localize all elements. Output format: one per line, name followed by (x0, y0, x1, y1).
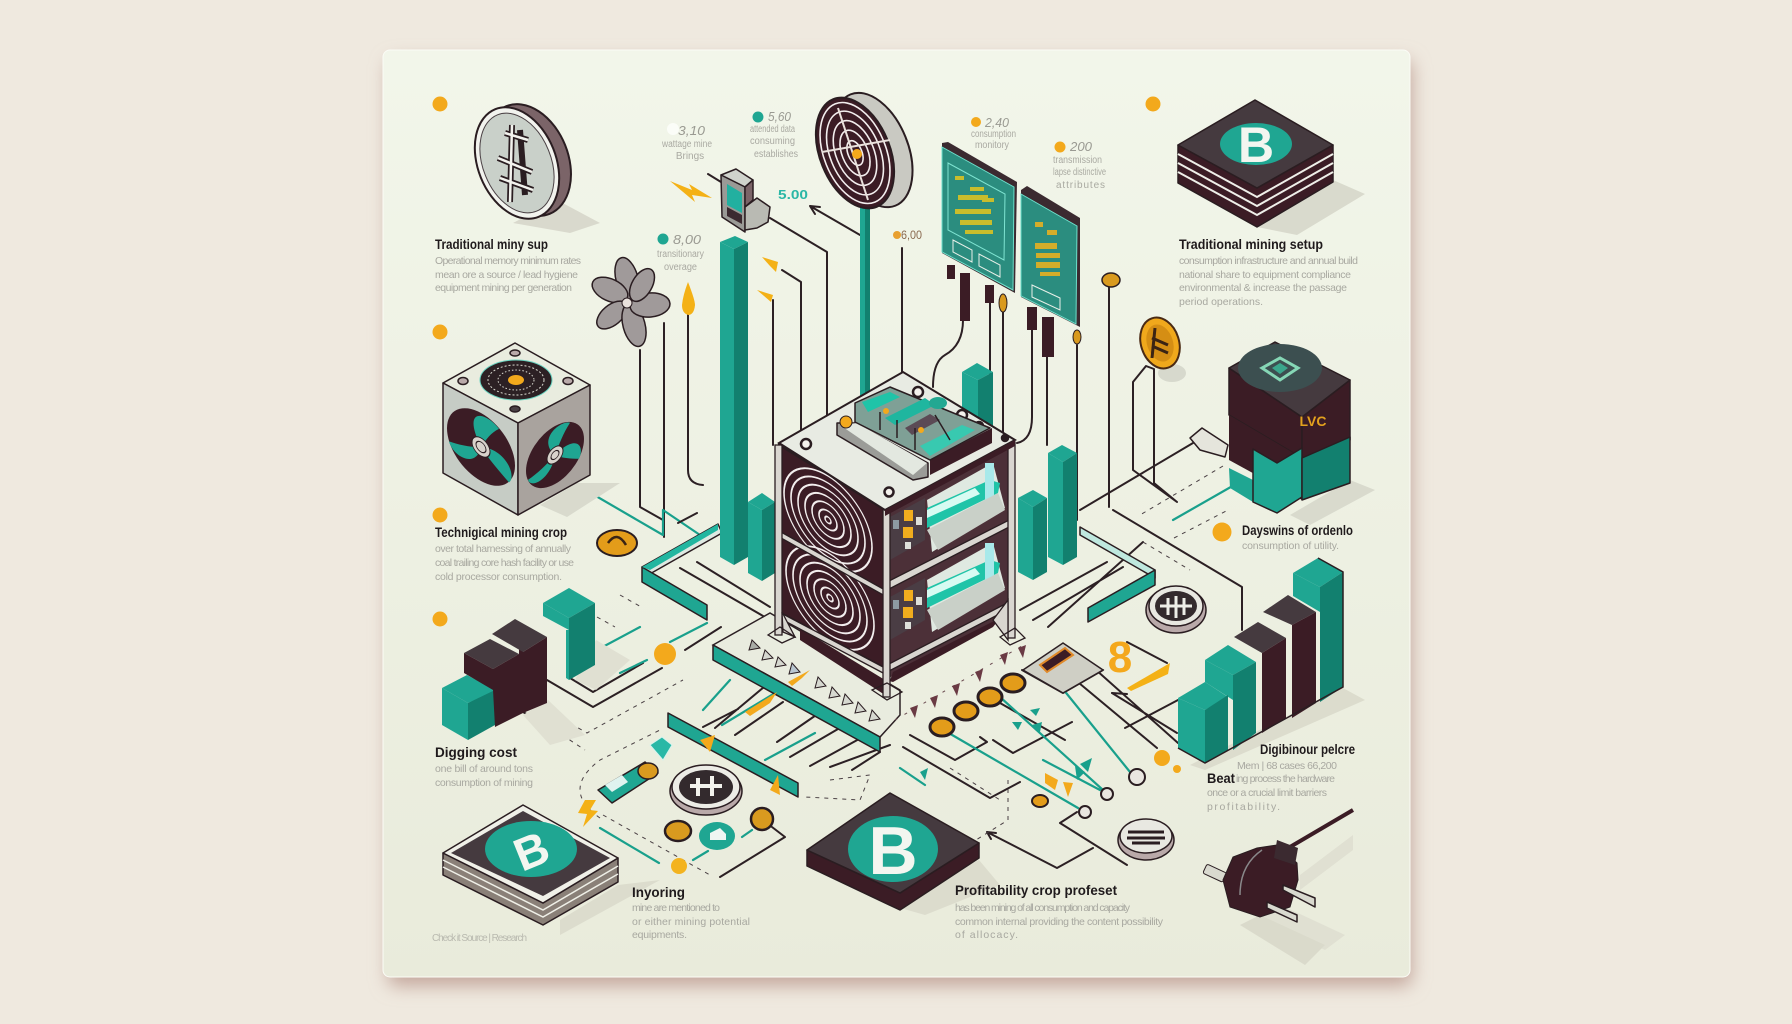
text block: digibinour pelcre: once or a crucial limit barriers (1207, 787, 1327, 799)
text block: traditional mining top right (1179, 236, 1358, 308)
icon: bitcoin card bottom centre: B (868, 813, 918, 889)
cube: right fan (526, 410, 584, 500)
text block: profitability (955, 882, 1164, 941)
text block: technological mining crop (435, 524, 574, 583)
icon: cooling cube (443, 343, 620, 517)
rig: top board module (837, 387, 992, 480)
text block: digibinour pelcre: profitability. (1207, 801, 1280, 813)
text block: inyoring: mine are mentioned to (632, 902, 720, 914)
text block: traditional mining top right: environmental & increase the passage (1179, 282, 1347, 294)
small orange coin (1032, 795, 1048, 807)
stat: 2,40: monitory (975, 140, 1009, 151)
icon: teal gem (650, 737, 672, 760)
text block: digging cost (435, 744, 533, 789)
icon: power plug (1203, 810, 1353, 965)
icon: bitcoin card bottom centre (807, 793, 1000, 915)
stat: 200 (1053, 139, 1106, 191)
stat: 200: lapse distinctive (1053, 167, 1106, 178)
rig: lower dark base (800, 618, 1000, 695)
icon: power brick right (1190, 342, 1375, 525)
text block: dynamics (1242, 522, 1353, 552)
central mining rig (768, 372, 1025, 700)
text block: traditional mining top left (435, 236, 581, 294)
step markers (432, 96, 1232, 626)
rig: upper shelf (890, 463, 1005, 560)
orange dot coin (654, 643, 676, 665)
stat: 200: 200 (1069, 139, 1093, 154)
text block: digibinour pelcre: Beat (1207, 770, 1235, 786)
text block: traditional mining top left: Operational memory minimum rates (435, 255, 581, 267)
rig: right face back (885, 440, 1015, 680)
icon: bitcoin card bottom left: B (506, 821, 557, 881)
panel: main board (383, 50, 1410, 977)
stat: 2,40: consumption (971, 129, 1016, 140)
text block: technological mining crop: cold processor consumption. (435, 571, 562, 583)
teal column left tall (720, 236, 748, 565)
icon: silver coin lower right (1118, 819, 1174, 860)
icon: lightning bolts and flames (578, 181, 778, 827)
text block: inyoring (632, 884, 750, 941)
footer note: Check it Source | Research (432, 933, 527, 944)
text block: profitability: Profitability crop profeset (955, 882, 1117, 898)
circular nodes (1079, 769, 1145, 818)
icon: power brick right: LVC (1300, 413, 1326, 429)
text block: digibinour pelcre: Mem | 68 cases 66,200 (1237, 760, 1337, 772)
icon: pinwheel fan (588, 255, 671, 349)
row of orange tokens (930, 674, 1025, 736)
rig: upper fan spiral (784, 449, 872, 591)
teal column left short (748, 493, 775, 581)
stat: 5,60: establishes (754, 149, 798, 160)
base plate with teal bars (668, 613, 1027, 797)
cube: left fan (447, 394, 515, 500)
stat: 3,10: Brings (676, 151, 704, 162)
text block: inyoring: or either mining potential (632, 916, 750, 928)
rig: lower shelf (890, 543, 1005, 640)
rig: top hole markers (801, 387, 1008, 496)
resistor plate right (1023, 643, 1103, 693)
text block: traditional mining top right: Traditional mining setup (1179, 236, 1323, 252)
stat: 8,00: transitionary (657, 249, 704, 260)
stat: 6,00: 6,00 (901, 228, 922, 242)
text block: inyoring: equipments. (632, 929, 687, 941)
screen cables and connectors (947, 265, 1120, 357)
stat: 3,10: 3,10 (678, 123, 706, 138)
icon: orange symbol: 8 (1108, 633, 1132, 682)
teal pole with fan (801, 81, 928, 400)
text block: profitability: of allocacy. (955, 929, 1018, 941)
text block: traditional mining top left: equipment mining per generation (435, 282, 572, 294)
icon: screen right (1021, 186, 1080, 327)
text block: digibinour pelcre: Digibinour pelcre (1260, 741, 1355, 757)
stat: 3,10: wattage mine (661, 139, 712, 150)
text block: digging cost: one bill of around tons (435, 763, 533, 775)
rig: top plate (779, 372, 1015, 510)
icon: teal token cartridge (598, 762, 658, 803)
stat: 8,00 (657, 232, 704, 273)
text block: technological mining crop: Technigical mining crop (435, 524, 567, 540)
teal columns right of server (962, 363, 1077, 580)
text block: dynamics: consumption of utility. (1242, 540, 1339, 552)
isometric teal frame right (1080, 527, 1155, 622)
icon: silver coin upper right (1146, 586, 1206, 633)
icon: orange coin right (1134, 312, 1186, 382)
text block: digibinour pelcre (1207, 741, 1355, 813)
text block: dynamics: Dayswins of ordenlo (1242, 522, 1353, 538)
icon: dark coin bottom (670, 765, 742, 815)
connector network (523, 174, 1243, 877)
stat: 200: transmission (1053, 155, 1102, 166)
text block: traditional mining top right: national share to equipment compliance (1179, 269, 1351, 281)
text block: digibinour pelcre: ing process the hardware (1236, 773, 1335, 785)
bar chart: left (442, 588, 630, 745)
stat: 200: attributes (1056, 180, 1105, 191)
text block: profitability: has been mining of all consumption and capacity (955, 902, 1131, 914)
stat: 6,00 (893, 228, 922, 242)
stat: 3,10 (661, 123, 712, 162)
stat: 8,00: overage (664, 262, 697, 273)
icon: chip card stack top right (1178, 100, 1365, 235)
rig: lower fan spiral (786, 527, 874, 669)
stat: 5.00 teal: 5.00 (778, 187, 808, 202)
bar chart: right (1178, 558, 1365, 770)
icon: orange coin lower left (597, 530, 637, 556)
text block: digging cost: Digging cost (435, 744, 517, 760)
stat: 2,40 (971, 115, 1016, 151)
text block: digging cost: consumption of mining (435, 777, 533, 789)
isometric teal frame left (642, 524, 722, 620)
icon: chip card stack top right: B (1238, 117, 1274, 173)
stat: 5,60 (750, 109, 798, 160)
text block: inyoring: Inyoring (632, 884, 685, 900)
teal flow arrowheads (920, 708, 1092, 780)
icon: power meter device (721, 169, 770, 232)
text block: technological mining crop: coal trailing core hash facility or use (435, 557, 574, 569)
text block: traditional mining top left: Traditional miny sup (435, 236, 548, 252)
stat: 5,60: 5,60 (768, 109, 792, 124)
text block: traditional mining top right: consumption infrastructure and annual build (1179, 255, 1358, 267)
rig: left face with fans (779, 445, 885, 668)
text block: traditional mining top right: period operations. (1179, 296, 1263, 308)
orange flow marks (1045, 750, 1181, 797)
stat: 8,00: 8,00 (673, 232, 702, 247)
stat: 5,60: attended data (750, 124, 795, 135)
text block: technological mining crop: over total harnessing of annually (435, 543, 572, 555)
rig: frame beams and legs (768, 442, 1025, 700)
icon: coin top left (459, 91, 600, 233)
stat: 5,60: consuming (750, 136, 795, 147)
bottom tokens (665, 808, 773, 874)
text block: traditional mining top left: mean ore a source / lead hygiene (435, 269, 578, 281)
icon: bitcoin card bottom left (443, 805, 660, 935)
text block: profitability: common internal providing the content possibility (955, 916, 1164, 928)
stat: 2,40: 2,40 (984, 115, 1010, 130)
icon: screen left (942, 142, 1017, 293)
